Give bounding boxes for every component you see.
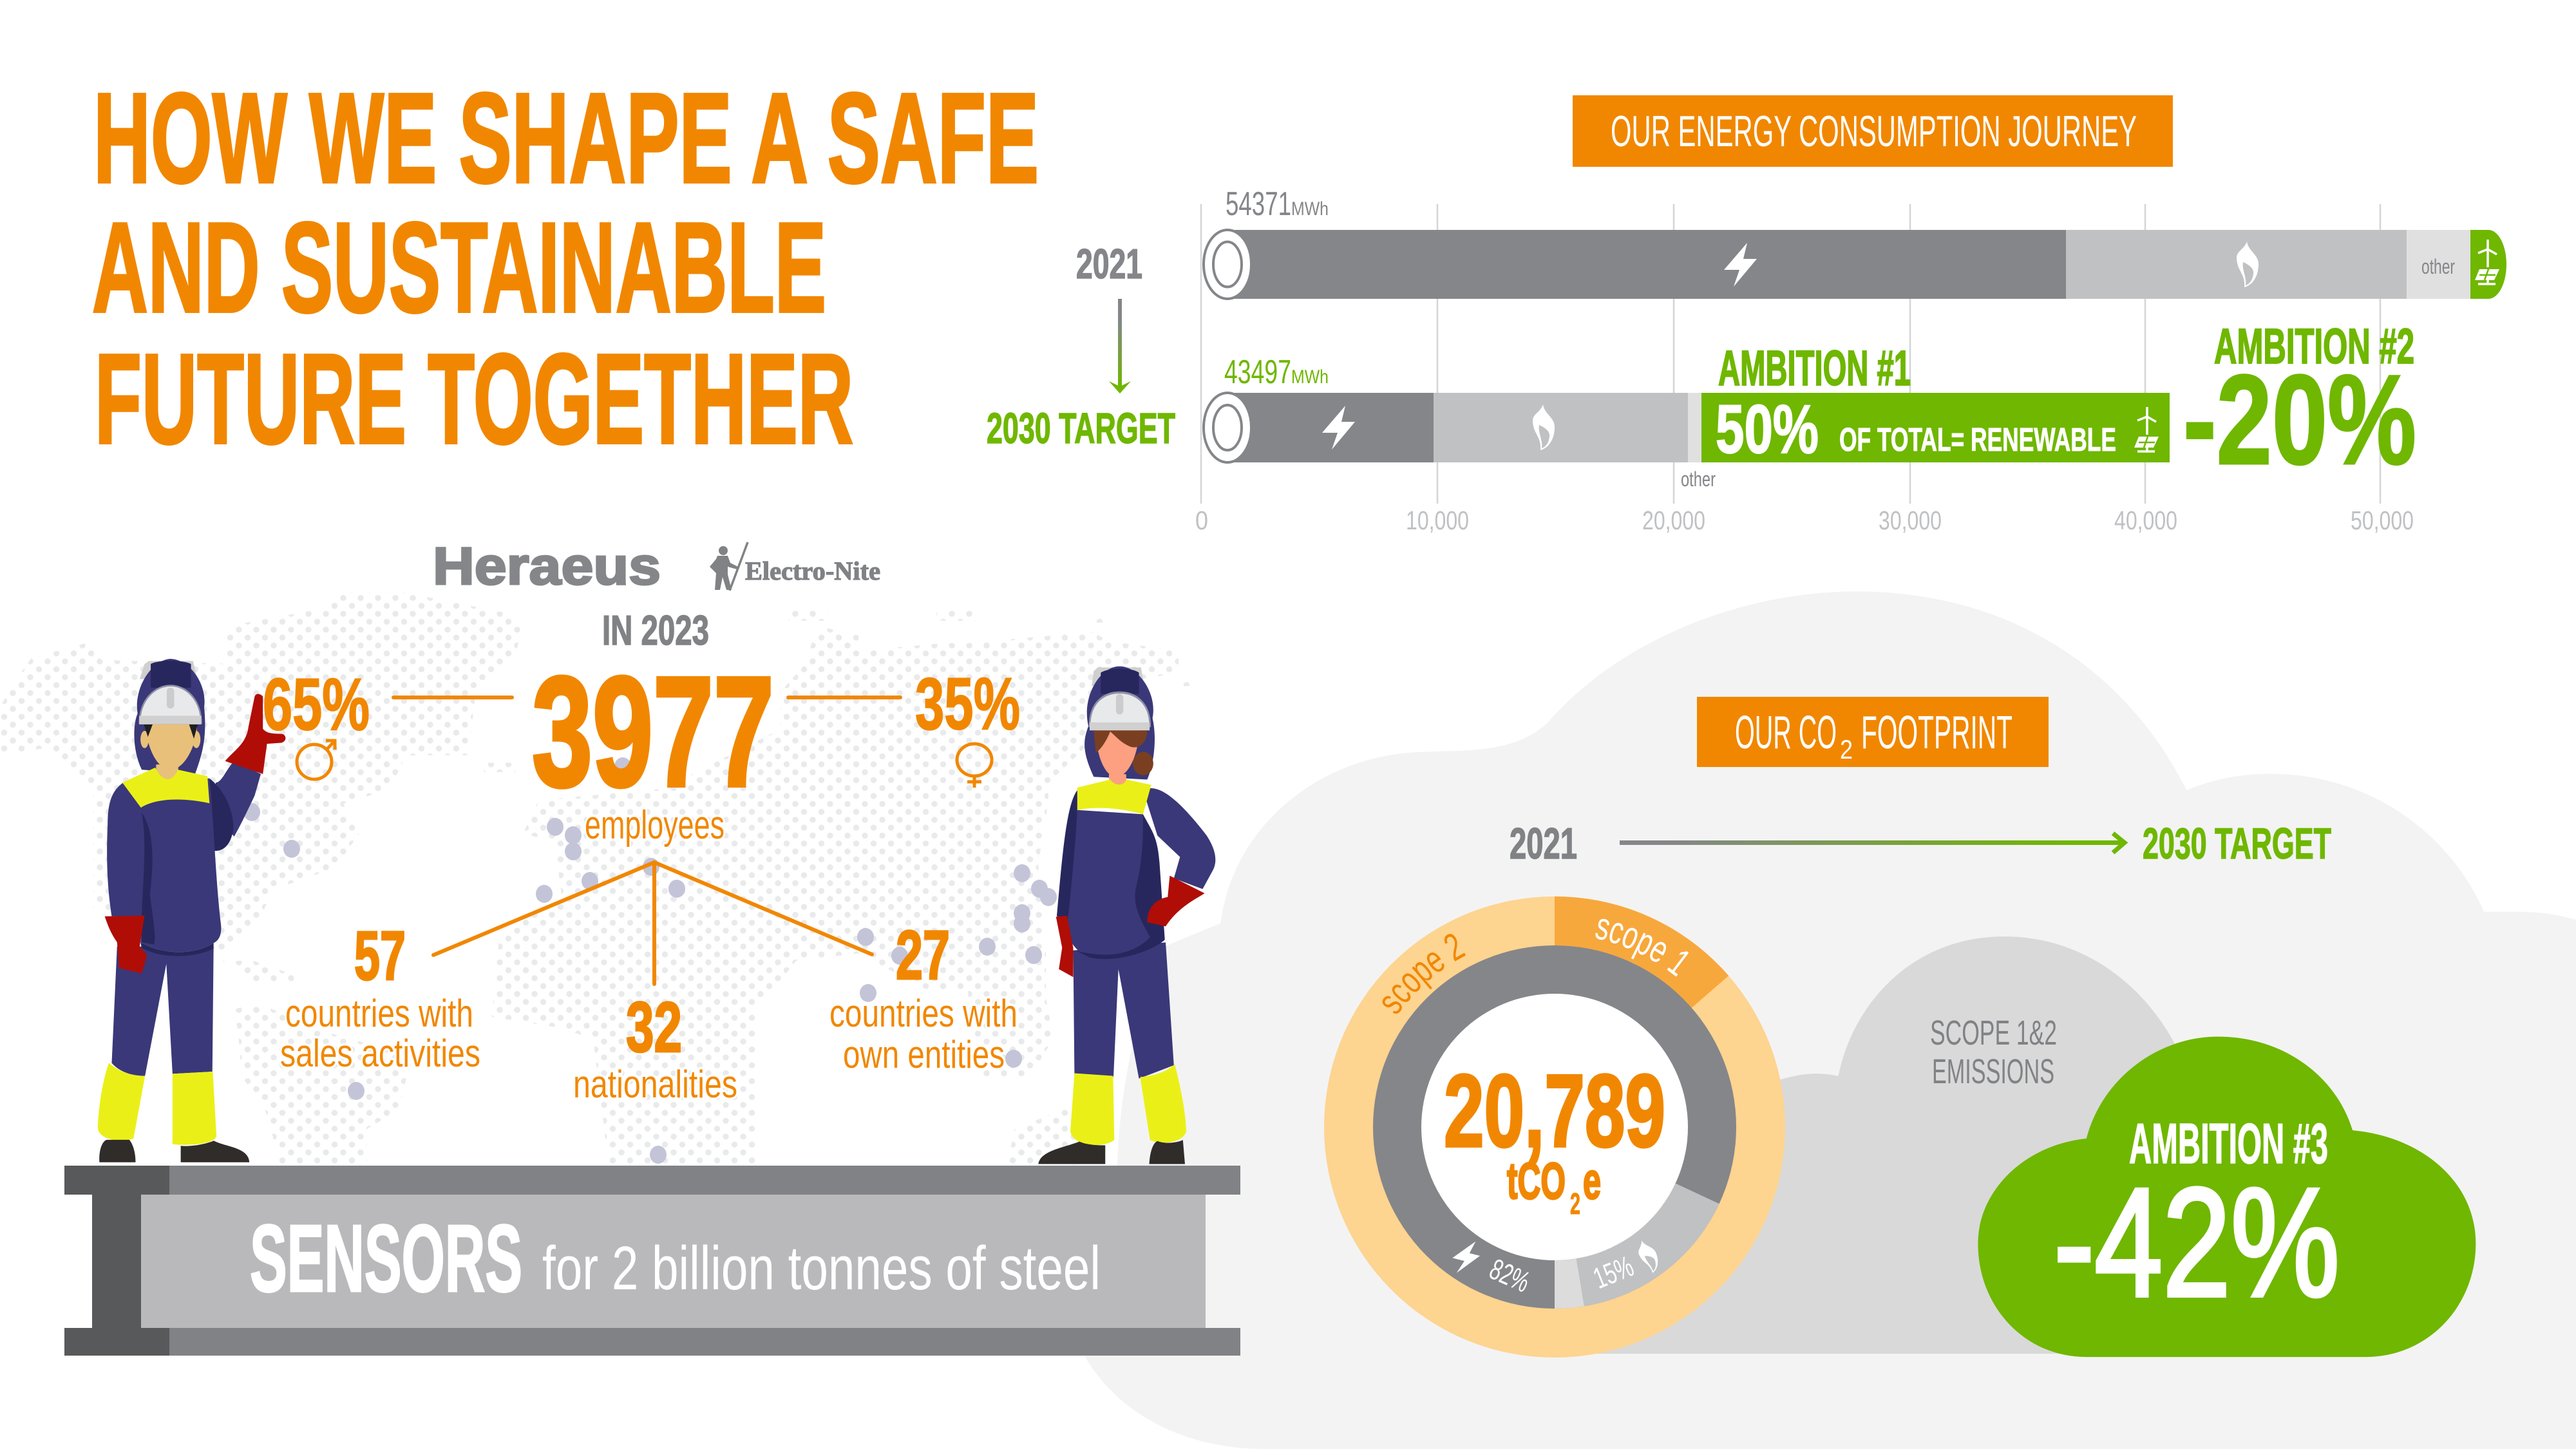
heading: CO2 footprint: 2 [1840, 734, 1853, 764]
icon: lightning [1322, 406, 1355, 450]
65 percent: 65% [263, 664, 370, 746]
employee total: 3977 [532, 645, 774, 819]
value 2021: 54371 [1226, 185, 1291, 223]
total value: 20,789 [1444, 1053, 1665, 1168]
label: other: other [1681, 468, 1716, 491]
title: HOW WE SHAPE A SAFE [93, 67, 1039, 210]
renewable text: OF TOTAL= RENEWABLE [1839, 421, 2116, 458]
value 2030: MWh [1291, 366, 1329, 388]
worker: woman [1038, 667, 1215, 1164]
27 stat [829, 916, 1018, 1076]
location markers [243, 757, 1057, 1164]
chart gridlines and axis: 40,000 [2114, 506, 2177, 535]
segment: scope 1 [1555, 896, 1728, 1008]
icon: turbine and solar [2475, 240, 2499, 284]
heading: CO2 footprint: OUR CO [1735, 707, 1837, 759]
logo: Electro-Nite: Electro-Nite [745, 556, 880, 585]
steel text: for 2 billion tonnes of steel [542, 1234, 1101, 1303]
chart gridlines and axis: 10,000 [1406, 506, 1469, 535]
energy chart [987, 185, 2506, 535]
background light cloud [1084, 591, 2576, 1449]
minus 20 percent: -20% [2183, 348, 2416, 491]
connector lines [393, 697, 900, 984]
label: scope 1: scope 1 [1595, 918, 1689, 976]
green cloud: ambition 3 [1978, 1037, 2476, 1357]
heading: energy journey: OUR ENERGY CONSUMPTION JOURNEY [1611, 107, 2137, 156]
icon: turbine and solar [2134, 407, 2159, 451]
employees label: employees [585, 803, 724, 848]
segment: fuel [1577, 1184, 1719, 1306]
chart gridlines and axis: 30,000 [1879, 506, 1942, 535]
27 stat: 27 [896, 916, 950, 994]
logo: Electro-Nite [710, 542, 880, 591]
32 stat: nationalities [573, 1063, 737, 1106]
employee statistics [263, 645, 1020, 1106]
icon: flame [1533, 404, 1555, 450]
label: 82 percent: 82% [1485, 1252, 1535, 1299]
57 stat: 57 [354, 916, 406, 994]
heading: energy journey [1573, 95, 2173, 167]
bar 2021 [1204, 230, 2506, 299]
label: scope 2: scope 2 [1382, 934, 1466, 1014]
label 2021: 2021 [1076, 240, 1142, 287]
title: AND SUSTAINABLE [92, 196, 826, 339]
scope emissions text: EMISSIONS [1932, 1052, 2054, 1091]
heading: CO2 footprint: FOOTPRINT [1861, 707, 2012, 759]
chart gridlines and axis: 50,000 [2351, 506, 2414, 535]
32 stat [573, 988, 737, 1106]
green cloud: ambition 3: AMBITION #3 [2129, 1112, 2328, 1175]
label: 2030 target: 2030 TARGET [2143, 819, 2331, 868]
dotted world map [0, 580, 1224, 1166]
icon: female [957, 744, 992, 788]
green cloud: ambition 3: -42% [2054, 1156, 2340, 1329]
logo: Heraeus: Heraeus [433, 537, 661, 596]
chart gridlines and axis: 0 [1195, 506, 1208, 535]
57 stat [280, 916, 480, 1075]
32 stat: 32 [626, 988, 682, 1067]
bar 2030 [1204, 390, 2170, 491]
value 2021: MWh [1291, 198, 1329, 220]
27 stat: countries with [829, 992, 1018, 1035]
heading: CO2 footprint [1697, 697, 2049, 767]
label: other: other [2421, 255, 2455, 278]
dark cloud: scope emissions [1553, 936, 2201, 1354]
label: 2021: 2021 [1510, 819, 1577, 868]
value 2030: 43497 [1224, 354, 1291, 391]
chart gridlines and axis: 20,000 [1642, 506, 1705, 535]
arrow right [1620, 833, 2125, 853]
title [92, 67, 1039, 471]
27 stat: own entities [843, 1033, 1005, 1076]
unit tCO2e: tCO [1507, 1152, 1566, 1209]
worker: man [98, 659, 285, 1162]
label 2030 target: 2030 TARGET [987, 404, 1175, 453]
icon: male [297, 741, 335, 779]
unit tCO2e: 2 [1570, 1187, 1580, 1220]
icon: flame [1634, 1237, 1663, 1275]
scope emissions text: SCOPE 1&2 [1930, 1014, 2057, 1052]
35 percent: 35% [915, 663, 1020, 745]
ambition 2: AMBITION #2 [2214, 319, 2414, 374]
icon: flame [2237, 242, 2259, 287]
ambition 1: AMBITION #1 [1718, 341, 1911, 396]
sensors text: SENSORS [250, 1206, 522, 1312]
donut chart [1324, 896, 1785, 1358]
label: 15 percent: 15% [1589, 1249, 1638, 1295]
title: FUTURE TOGETHER [95, 328, 853, 471]
unit tCO2e: e [1583, 1152, 1601, 1209]
icon: lightning [1449, 1237, 1483, 1277]
label: in 2023: IN 2023 [602, 607, 709, 654]
scope emissions text [1930, 1014, 2057, 1091]
57 stat: countries with [285, 992, 473, 1035]
50 percent text: 50% [1716, 390, 1819, 468]
57 stat: sales activities [280, 1032, 480, 1075]
steel beam banner [64, 1166, 1240, 1356]
arrow down [1109, 299, 1131, 393]
segment: other [1555, 1258, 1584, 1309]
icon: lightning [1724, 243, 1757, 287]
chart gridlines and axis [1195, 204, 2414, 535]
